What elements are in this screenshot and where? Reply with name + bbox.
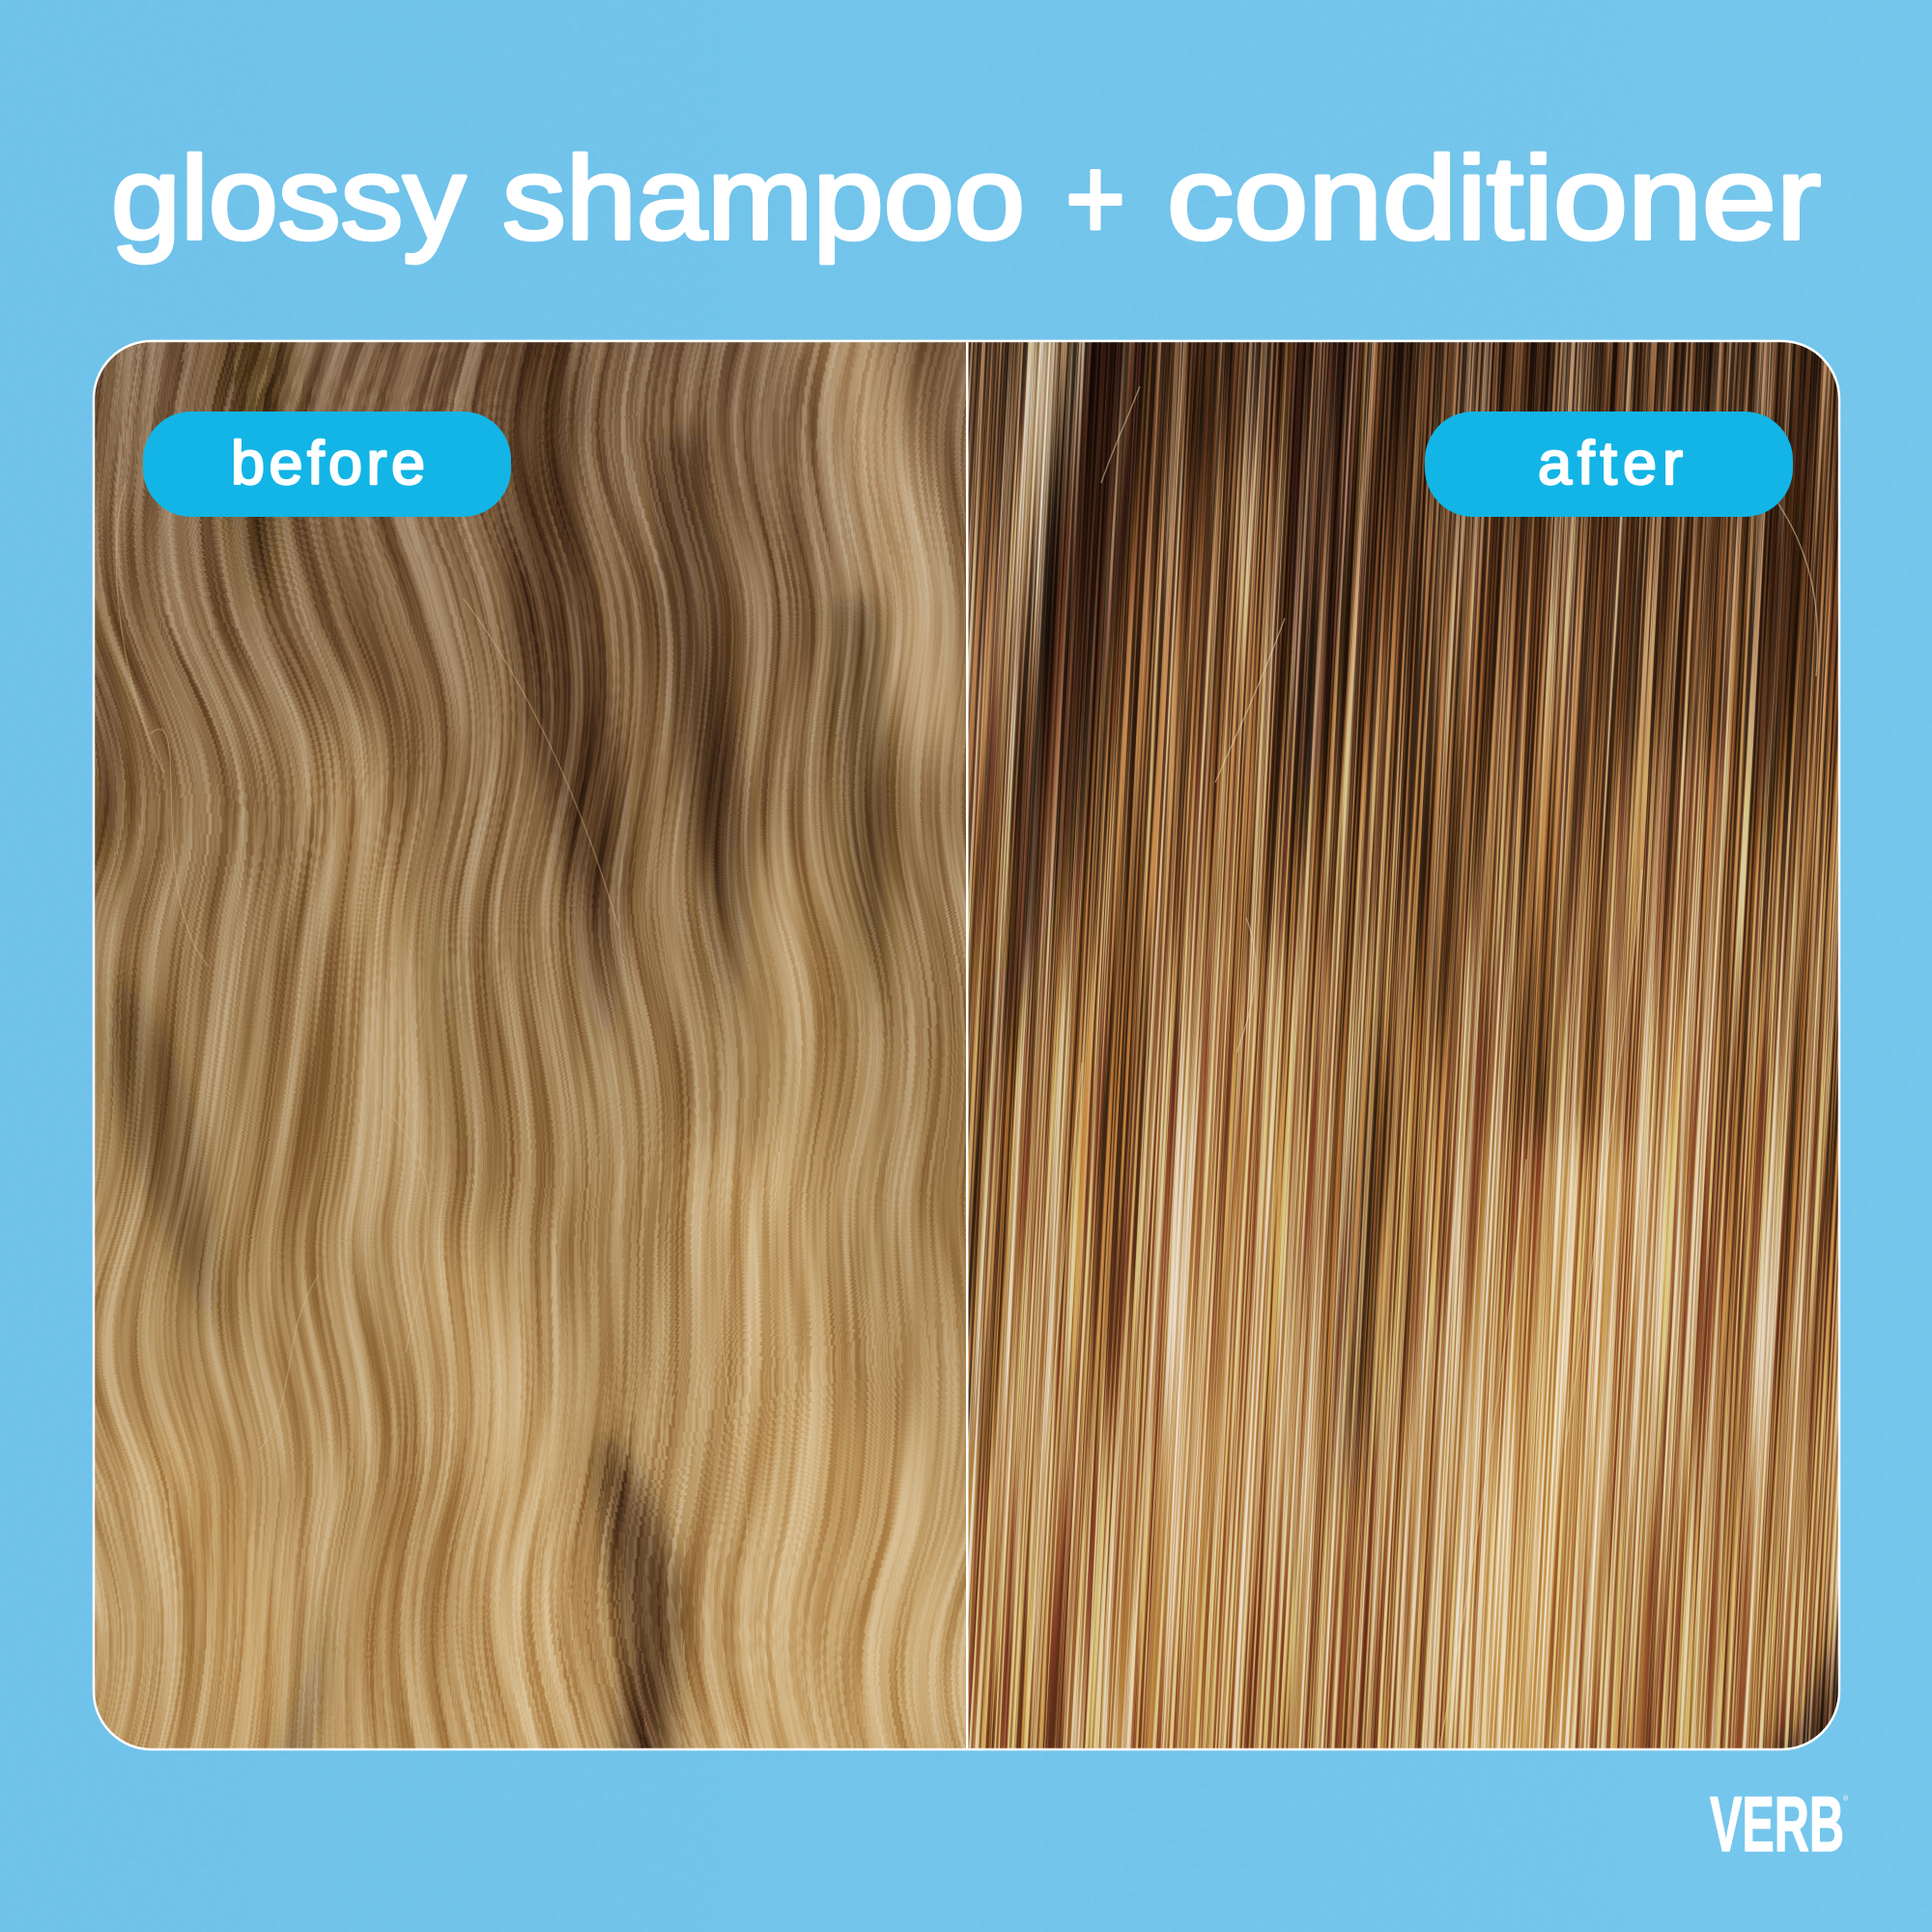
logo: VERB <box>1710 1781 1849 1868</box>
logo: VERB: ® <box>1843 1795 1849 1803</box>
title: shampoo <box>502 132 1025 264</box>
title: glossy <box>111 132 466 264</box>
label: before: before <box>231 430 425 497</box>
title: conditioner <box>1167 132 1821 264</box>
label: before <box>143 412 511 517</box>
photo: before hair, wavy <box>93 270 967 1816</box>
title <box>111 132 1821 264</box>
panel: before and after hair comparison <box>95 342 1838 1748</box>
title: + <box>1065 132 1125 264</box>
panel outline <box>94 341 1839 1749</box>
label: after <box>1425 412 1793 517</box>
divider between photos <box>966 341 968 1749</box>
label: after: after <box>1538 430 1683 497</box>
photo: after hair, straight and glossy <box>968 342 1838 1748</box>
logo: VERB: VERB <box>1710 1781 1844 1868</box>
